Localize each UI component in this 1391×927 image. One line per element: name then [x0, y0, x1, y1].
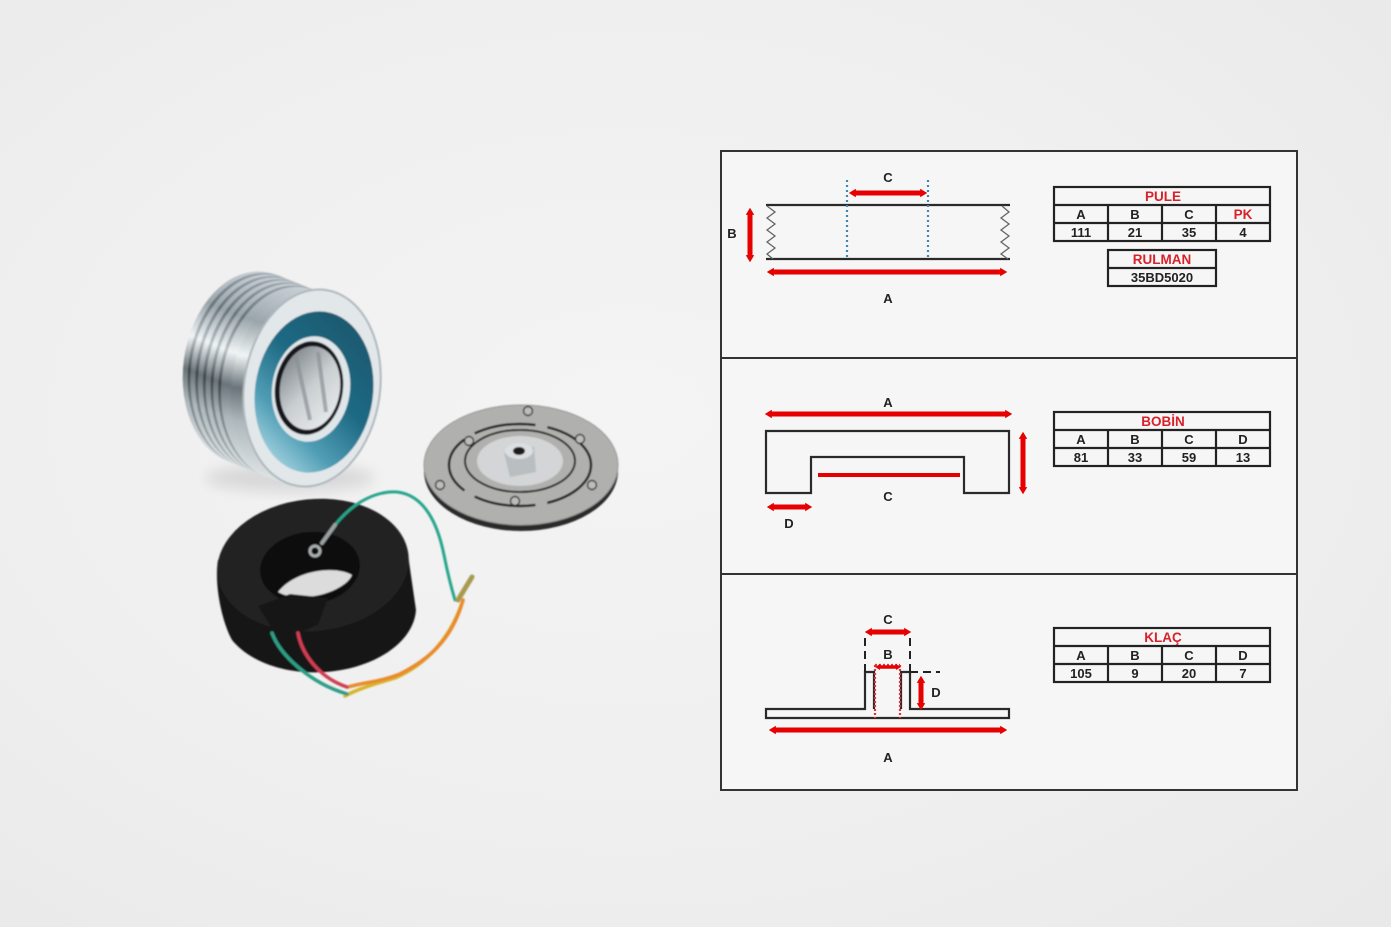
table: BOBIN: C — [1184, 432, 1194, 447]
pulley drawing — [727, 170, 1010, 306]
table: PULE: B — [1130, 207, 1140, 222]
table: BOBIN: BOBİN — [1141, 414, 1185, 429]
table: PULE: 111 — [1071, 225, 1091, 240]
clutch plate drawing: C — [883, 612, 893, 627]
table: BOBIN: 33 — [1128, 450, 1142, 465]
table: BOBIN: A — [1076, 432, 1086, 447]
table: KLAC: KLAÇ — [1144, 630, 1182, 645]
coil drawing: C — [883, 489, 893, 504]
section: pulley — [727, 170, 1270, 306]
table: KLAC — [1054, 628, 1270, 682]
table: PULE: A — [1076, 207, 1086, 222]
coil drawing: A — [883, 395, 893, 410]
table: PULE: 35 — [1182, 225, 1196, 240]
table: KLAC: A — [1076, 648, 1086, 663]
table: BOBIN: 81 — [1074, 450, 1088, 465]
pulley drawing: C — [883, 170, 893, 185]
section: coil — [766, 395, 1270, 531]
table: KLAC: D — [1238, 648, 1248, 663]
coil drawing: D — [784, 516, 794, 531]
table: KLAC: 20 — [1182, 666, 1196, 681]
table: PULE: 21 — [1128, 225, 1142, 240]
table: BOBIN: B — [1130, 432, 1140, 447]
table: PULE: PK — [1234, 207, 1253, 222]
table: BOBIN: 13 — [1236, 450, 1250, 465]
pulley drawing: B — [727, 226, 737, 241]
table: KLAC: 9 — [1131, 666, 1139, 681]
bearing — [265, 331, 357, 447]
table: PULE: 4 — [1239, 225, 1247, 240]
clutch plate drawing: D — [931, 685, 941, 700]
table: BOBIN: 59 — [1182, 450, 1196, 465]
section: clutch plate — [766, 612, 1270, 765]
photo: clutch parts — [169, 262, 618, 696]
coil drawing — [766, 395, 1023, 531]
table: KLAC: 105 — [1070, 666, 1092, 681]
table: BOBIN: D — [1238, 432, 1248, 447]
table: BOBIN — [1054, 412, 1270, 466]
table: KLAC: 7 — [1239, 666, 1247, 681]
coil — [211, 489, 416, 672]
wires — [272, 492, 472, 696]
clutch plate drawing: A — [883, 750, 893, 765]
hub plate — [424, 405, 618, 531]
table: KLAC: B — [1130, 648, 1140, 663]
clutch plate drawing: B — [883, 647, 893, 662]
table: PULE — [1054, 187, 1270, 241]
table: PULE: C — [1184, 207, 1194, 222]
table: RULMAN: 35BD5020 — [1131, 270, 1193, 285]
table: RULMAN: RULMAN — [1133, 252, 1191, 267]
clutch plate drawing — [766, 612, 1009, 765]
diagram panel — [721, 151, 1297, 790]
pulley drawing: A — [883, 291, 893, 306]
pulley — [169, 262, 393, 496]
table: PULE: PULE — [1145, 189, 1181, 204]
table: RULMAN — [1108, 250, 1216, 286]
table: KLAC: C — [1184, 648, 1194, 663]
